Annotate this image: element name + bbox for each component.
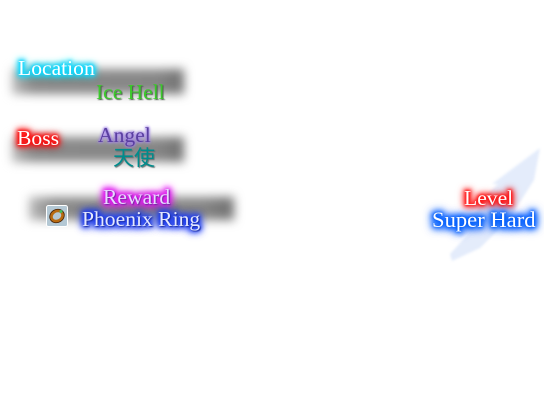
value: angel: Angel bbox=[98, 123, 151, 147]
brush stroke behind level bbox=[450, 149, 540, 261]
label: location: Location bbox=[18, 56, 95, 80]
label: reward: Reward bbox=[103, 185, 170, 209]
value: super hard: Super Hard bbox=[432, 207, 536, 232]
label: boss: Boss bbox=[17, 126, 59, 150]
value: ice hell: Ice Hell bbox=[96, 80, 165, 104]
value: phoenix ring: Phoenix Ring bbox=[82, 207, 200, 231]
label: level: Level bbox=[464, 186, 513, 210]
bar: location bbox=[12, 69, 184, 94]
icon: phoenix ring bbox=[46, 205, 68, 227]
bar: boss bbox=[12, 137, 184, 162]
bar: reward bbox=[29, 197, 234, 220]
value: angel in chinese: 天使 bbox=[113, 146, 155, 170]
